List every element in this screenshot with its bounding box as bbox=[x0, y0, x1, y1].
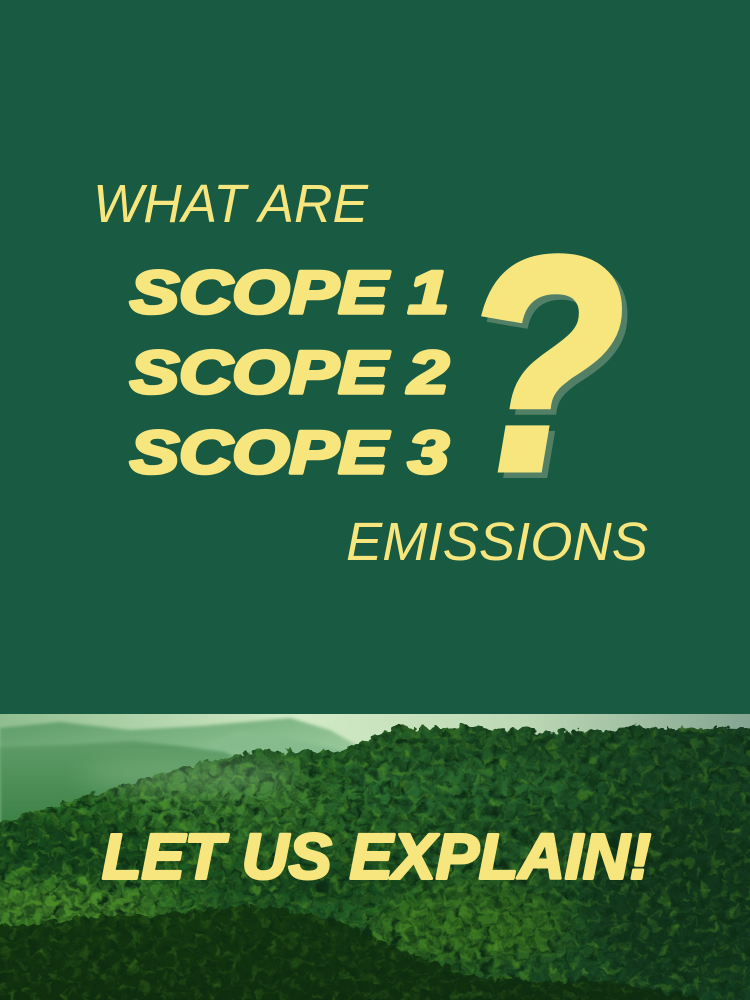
heading: scope list bbox=[130, 259, 449, 486]
forest photo band bbox=[0, 714, 750, 1000]
question mark with offset shadow: ? bbox=[461, 194, 624, 534]
scope 1: SCOPE 1 bbox=[130, 259, 449, 326]
heading: what are: WHAT ARE bbox=[93, 174, 369, 234]
background panel bbox=[0, 0, 750, 714]
scope 2: SCOPE 2 bbox=[130, 339, 449, 406]
call to action: let us explain: LET US EXPLAIN! bbox=[102, 820, 651, 892]
question mark with offset shadow: ? bbox=[466, 200, 630, 539]
scope 3: SCOPE 3 bbox=[130, 419, 449, 486]
heading: emissions: EMISSIONS bbox=[346, 512, 648, 572]
